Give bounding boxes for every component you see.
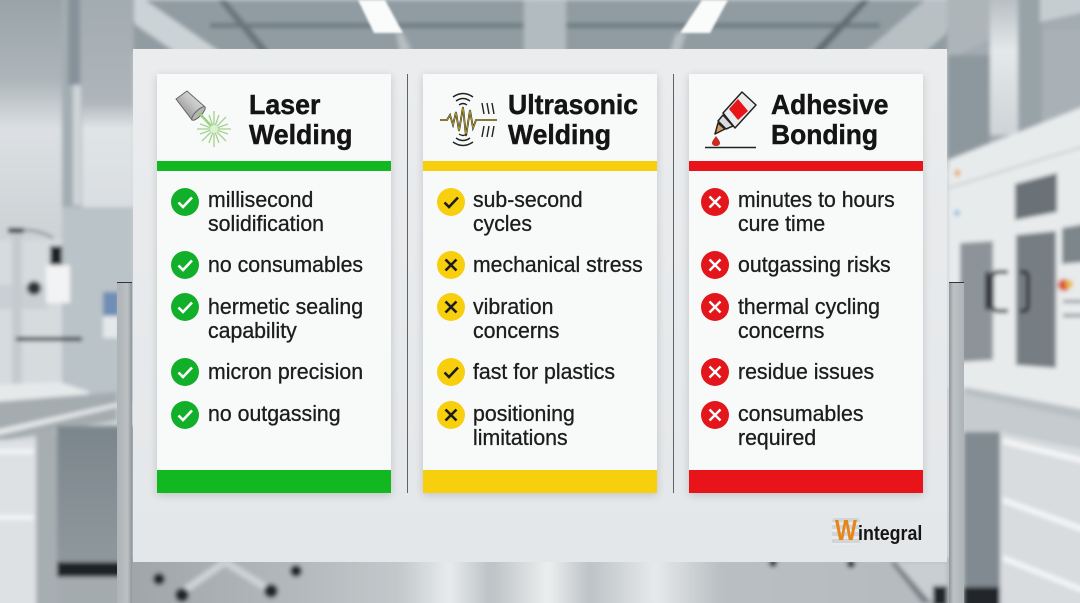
heading: [248, 89, 352, 150]
ceiling lights: [358, 0, 728, 33]
floor: [128, 558, 952, 603]
red divider bar: [689, 161, 923, 171]
text: thermal cycling: [738, 294, 880, 319]
text: hermetic sealing: [208, 294, 363, 319]
icon: cross: [437, 401, 465, 429]
text: vibration: [473, 294, 553, 319]
text: [738, 402, 863, 449]
text: concerns: [738, 318, 824, 342]
icon: check: [171, 358, 199, 386]
icon: cross: [701, 358, 729, 386]
heading: Bonding: [771, 119, 878, 150]
text: micron precision: [208, 359, 363, 384]
icon: ultrasonic wave: [440, 92, 497, 146]
icon: check: [171, 401, 199, 429]
column divider right: [673, 74, 674, 493]
text: cure time: [738, 210, 825, 236]
heading: [771, 89, 888, 150]
text: required: [738, 424, 816, 450]
yellow footer bar: [423, 470, 657, 493]
red footer bar: [689, 470, 923, 493]
logo wordmark: integral: [858, 523, 922, 545]
heading: Ultrasonic: [508, 89, 638, 120]
icon: cross: [701, 293, 729, 321]
item: [171, 293, 363, 343]
text: sub-second: [473, 187, 583, 212]
text: fast for plastics: [473, 359, 615, 384]
text: no outgassing: [208, 401, 341, 426]
logo: Wintegral: [832, 518, 924, 548]
icon: cross: [437, 293, 465, 321]
text: residue issues: [738, 359, 874, 384]
text: cycles: [473, 210, 532, 236]
logo W: W: [835, 515, 857, 547]
text: no consumables: [208, 252, 363, 277]
text: limitations: [473, 424, 568, 450]
item: [689, 402, 923, 452]
item: [701, 251, 891, 279]
item: [437, 358, 615, 386]
text: mechanical stress: [473, 252, 643, 277]
heading: Welding: [508, 119, 611, 150]
heading: Welding: [249, 119, 352, 150]
text: [472, 294, 559, 342]
icon: glue bottle: [705, 91, 757, 148]
panel: laser welding: [157, 74, 391, 493]
right side: duct, machine and counter: [947, 0, 1080, 603]
text: [738, 187, 895, 236]
icon: check: [171, 293, 199, 321]
yellow divider bar: [423, 161, 657, 171]
item: [437, 293, 559, 342]
column divider left: [407, 74, 408, 493]
comparison board panel: [133, 49, 947, 562]
text: [473, 401, 575, 450]
icon: check: [437, 188, 465, 216]
item: [171, 401, 341, 429]
item: [701, 187, 895, 236]
icon: check: [171, 251, 199, 279]
icon: cross: [701, 401, 729, 429]
icon: cross: [701, 188, 729, 216]
icon: cross: [701, 251, 729, 279]
text: [208, 294, 363, 343]
text: [473, 187, 583, 236]
heading: Laser: [249, 89, 320, 120]
green divider bar: [157, 161, 391, 171]
text: [208, 187, 324, 236]
text: [738, 294, 880, 342]
item: [701, 293, 880, 342]
panel: ultrasonic welding: [423, 74, 657, 493]
logo mark background: [832, 518, 860, 545]
item: [437, 401, 575, 450]
left wall: [0, 0, 134, 603]
left board post: [117, 282, 132, 603]
icon: check: [171, 188, 199, 216]
right board post: [949, 282, 964, 603]
icon: cross: [437, 251, 465, 279]
heading: Adhesive: [771, 89, 888, 120]
panel: adhesive bonding: [689, 74, 923, 493]
text: millisecond: [208, 187, 313, 212]
text: capability: [208, 318, 297, 342]
text: positioning: [473, 401, 575, 426]
item: [171, 358, 363, 386]
text: solidification: [208, 210, 324, 236]
text: outgassing risks: [738, 252, 891, 277]
item: [701, 358, 874, 386]
icon: check: [437, 358, 465, 386]
item: [171, 251, 363, 279]
text: minutes to hours: [738, 187, 895, 212]
icon: laser head and spark: [175, 90, 231, 147]
ceiling: [0, 0, 1080, 52]
green footer bar: [157, 470, 391, 493]
item: [437, 187, 583, 236]
text: consumables: [738, 401, 863, 426]
heading: [508, 89, 638, 150]
item: [437, 251, 643, 279]
text: concerns: [473, 318, 559, 342]
item: [171, 187, 324, 236]
